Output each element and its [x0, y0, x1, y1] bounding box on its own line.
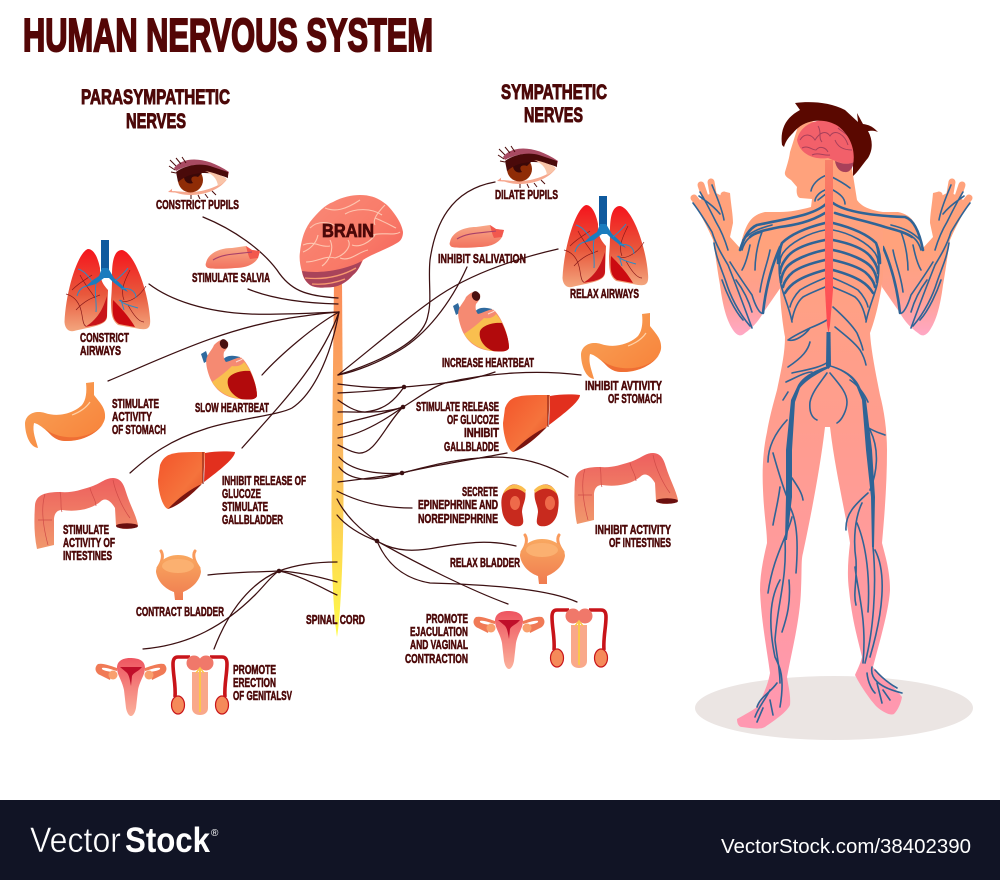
- icon: left intestines: [34, 478, 138, 549]
- brain in head: [797, 120, 855, 172]
- spinal cord: [331, 280, 344, 637]
- icon: right stomach: [581, 313, 661, 379]
- nerves: ribs left: [778, 223, 825, 322]
- label: inhibit activity of stomach: [585, 379, 662, 406]
- label: inhibit release of glucoze: INHIBIT RELEASE OF: [222, 474, 306, 488]
- label: inhibit release of glucoze: GLUCOZE: [222, 487, 261, 501]
- label: stimulate activity of stomach: STIMULATE: [112, 397, 159, 411]
- heading: sympathetic nerves: NERVES: [524, 103, 583, 127]
- label: secrete epinephrine and norepinephrine: NOREPINEPHRINE: [418, 512, 498, 526]
- parasympathetic nerve lines: [108, 217, 339, 649]
- label: contract bladder: CONTRACT BLADDER: [136, 605, 224, 619]
- label: relax airways: RELAX AIRWAYS: [570, 287, 639, 301]
- icon: right intestines: [574, 453, 678, 524]
- floor shadow: [695, 676, 973, 740]
- label: inhibit activity of stomach: INHIBIT AVTIVITY: [585, 379, 662, 393]
- footer bar: [0, 800, 1000, 880]
- label: inhibit activity of intestines: INHIBIT ACTIVITY: [595, 523, 671, 537]
- footer logo: [30, 821, 219, 860]
- label: constrict airways: CONSTRICT: [80, 331, 129, 345]
- label: stimulate release of glucoze: [416, 400, 499, 454]
- heading: sympathetic nerves: [501, 80, 607, 127]
- footer logo: ®: [211, 828, 219, 839]
- label: promote ejaculation and vaginal contraction: EJACULATION: [410, 625, 468, 639]
- label: promote ejaculation and vaginal contraction: PROMOTE: [426, 612, 468, 626]
- icon: right female reproductive organs: [474, 611, 544, 669]
- sympathetic nerve lines: [337, 182, 581, 604]
- label: stimulate release of glucoze: INHIBIT: [464, 426, 499, 440]
- label: stimulate release of glucoze: STIMULATE RELEASE: [416, 400, 499, 414]
- label: constrict pupils: CONSTRICT PUPILS: [156, 198, 239, 212]
- label: slow heartbeat: SLOW HEARTBEAT: [195, 401, 269, 415]
- left arm with nerves: [693, 182, 790, 335]
- label: stimulate activity of intestines: STIMULATE: [63, 523, 109, 537]
- label: secrete epinephrine and norepinephrine: EPINEPHRINE AND: [418, 498, 498, 512]
- label: stimulate activity of intestines: ACTIVITY OF: [63, 536, 115, 550]
- icon: right bladder: [520, 535, 565, 584]
- icon: left eye: [168, 157, 229, 199]
- brain label: BRAIN: [322, 220, 374, 241]
- icon: right male reproductive organs: [550, 608, 608, 668]
- human figure: [693, 102, 970, 729]
- heading: sympathetic nerves: SYMPATHETIC: [501, 80, 607, 104]
- label: stimulate activity of stomach: OF STOMACH: [112, 423, 166, 437]
- icon: left tongue: [206, 246, 260, 269]
- label: promote ejaculation and vaginal contraction: [405, 612, 468, 666]
- heading: parasympathetic nerves: [81, 85, 230, 133]
- label: stimulate activity of stomach: ACTIVITY: [112, 410, 152, 424]
- label: stimulate activity of intestines: [63, 523, 115, 563]
- brain: [300, 195, 403, 288]
- icon: right tongue: [450, 225, 504, 248]
- nerves: neck and shoulders: [740, 175, 923, 250]
- label: inhibit release of glucoze: GALLBLADDER: [222, 513, 283, 527]
- label: increase heartbeat: INCREASE HEARTBEAT: [442, 356, 534, 370]
- icon: right lungs: [562, 196, 648, 287]
- label: inhibit activity of intestines: [595, 523, 671, 550]
- hair: [782, 102, 878, 176]
- body silhouette: [737, 120, 902, 729]
- label: stimulate release of glucoze: GALLBLADDE: [444, 440, 499, 454]
- label: promote erection: PROMOTE: [233, 663, 276, 677]
- icon: right heart: [453, 290, 509, 352]
- heading: parasympathetic nerves: NERVES: [126, 109, 186, 133]
- icon: left bladder: [156, 551, 201, 600]
- label: dilate pupils: DILATE PUPILS: [495, 188, 558, 202]
- label: promote erection: OF GENITALSV: [233, 689, 292, 703]
- label: secrete epinephrine and norepinephrine: SECRETE: [462, 485, 498, 499]
- label: promote erection: [233, 663, 292, 703]
- nerves: ribs right: [833, 223, 880, 322]
- label: spinal cord: SPINAL CORD: [306, 613, 365, 627]
- label: promote ejaculation and vaginal contraction: CONTRACTION: [405, 652, 468, 666]
- heading: parasympathetic nerves: PARASYMPATHETIC: [81, 85, 230, 109]
- icon: kidneys: [501, 484, 559, 526]
- label: constrict airways: [80, 331, 129, 358]
- footer logo: Vector: [30, 821, 121, 860]
- spinal cord in figure: [825, 160, 833, 333]
- footer logo: Stock: [125, 821, 210, 860]
- title: HUMAN NERVOUS SYSTEM: [23, 9, 433, 61]
- icon: left stomach: [25, 382, 105, 448]
- label: stimulate salvia: STIMULATE SALVIA: [192, 271, 270, 285]
- label: constrict airways: AIRWAYS: [80, 344, 121, 358]
- nerves: legs: [755, 420, 902, 722]
- label: relax bladder: RELAX BLADDER: [450, 556, 520, 570]
- right arm with nerves: [873, 182, 970, 335]
- label: inhibit activity of stomach: OF STOMACH: [608, 392, 662, 406]
- label: secrete epinephrine and norepinephrine: [418, 485, 498, 526]
- label: stimulate release of glucoze: OF GLUCOZE: [447, 413, 499, 427]
- label: promote ejaculation and vaginal contraction: AND VAGINAL: [410, 638, 468, 652]
- icon: left liver: [158, 451, 235, 509]
- icon: left heart: [201, 338, 257, 400]
- label: inhibit release of glucoze: [222, 474, 306, 527]
- icon: right liver: [503, 394, 580, 452]
- label: inhibit activity of intestines: OF INTESTINES: [609, 536, 671, 550]
- icon: left female reproductive organs: [96, 658, 166, 716]
- label: stimulate activity of stomach: [112, 397, 166, 437]
- label: promote erection: ERECTION: [233, 676, 276, 690]
- icon: left male reproductive organs: [172, 656, 228, 715]
- label: inhibit salivation: INHIBIT SALIVATION: [438, 252, 526, 266]
- nerves: abdomen and pelvis: [783, 307, 875, 547]
- footer image id: VectorStock.com/38402390: [721, 836, 971, 858]
- label: inhibit release of glucoze: STIMULATE: [222, 500, 268, 514]
- icon: right eye: [497, 146, 558, 188]
- label: stimulate activity of intestines: INTESTINES: [63, 549, 112, 563]
- icon: left lungs: [64, 240, 150, 331]
